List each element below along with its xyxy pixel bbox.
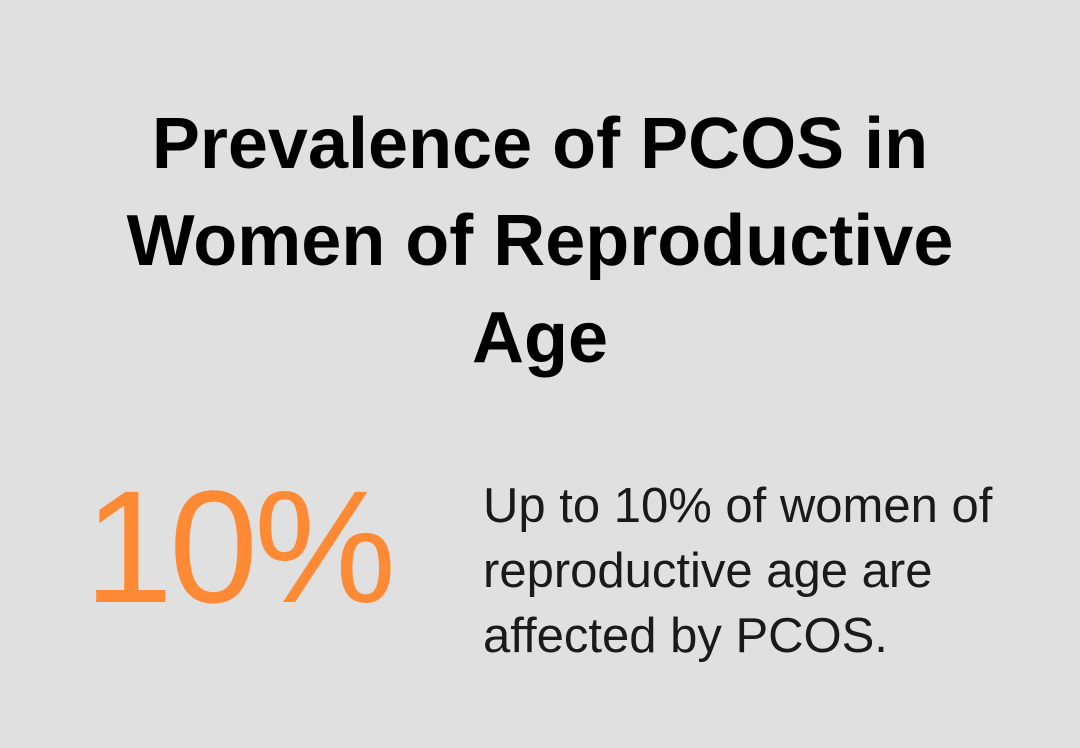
- title: Prevalence of PCOS in: [152, 104, 928, 184]
- title: Women of Reproductive: [127, 201, 953, 281]
- description text: [483, 479, 992, 663]
- big statistic: 10%: 10%: [84, 457, 392, 636]
- description text: affected by PCOS.: [483, 609, 888, 663]
- description text: reproductive age are: [483, 544, 932, 598]
- description text: Up to 10% of women of: [483, 479, 992, 533]
- title: [126, 104, 953, 378]
- title: Age: [472, 298, 608, 378]
